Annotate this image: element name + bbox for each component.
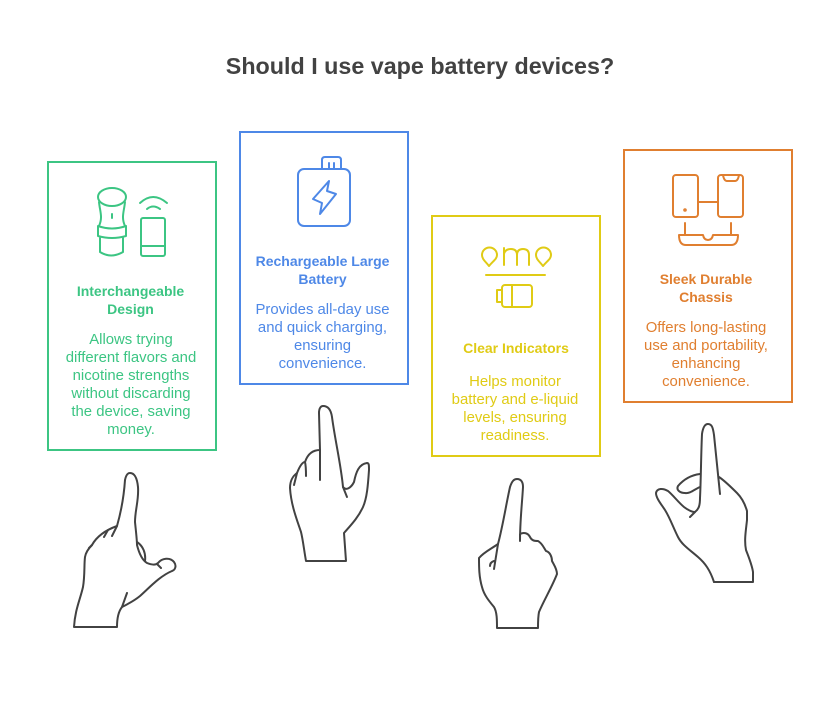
hand: pointing up under Clear Indicators (479, 479, 557, 628)
heading: Battery (298, 271, 347, 287)
description: levels, ensuring (463, 410, 567, 426)
heading: Rechargeable Large (256, 253, 390, 269)
description: nicotine strengths (73, 368, 189, 384)
description: the device, saving (71, 404, 191, 420)
heading: Chassis (679, 289, 733, 305)
icon: battery with lightning bolt (298, 157, 350, 226)
description: Offers long-lasting (646, 320, 766, 336)
hand: pointing up under Interchangeable Design (74, 473, 175, 627)
heading: Design (107, 301, 154, 317)
description: different flavors and (66, 350, 196, 366)
icon: connected phones and tray (673, 175, 743, 245)
title: Should I use vape battery devices? (226, 53, 614, 79)
heading: Clear Indicators (463, 340, 569, 356)
description: and quick charging, (258, 320, 387, 336)
hand: pointing up under Rechargeable Large Battery (290, 406, 369, 561)
description: Provides all-day use (255, 302, 390, 318)
description: Allows trying (89, 332, 173, 348)
description: use and portability, (644, 338, 768, 354)
description: without discarding (70, 386, 191, 402)
heading: Sleek Durable (660, 271, 753, 287)
panel: Rechargeable Large Battery (240, 132, 408, 384)
description: convenience. (662, 374, 750, 390)
description: readiness. (481, 428, 549, 444)
icon: indicators and battery (482, 248, 551, 307)
description: enhancing (672, 356, 740, 372)
description: convenience. (279, 356, 366, 372)
description: money. (107, 422, 155, 438)
heading: Interchangeable (77, 283, 184, 299)
description: ensuring (294, 338, 351, 354)
description: battery and e-liquid (452, 392, 578, 408)
description: Helps monitor (469, 374, 561, 390)
panel: Interchangeable Design (48, 162, 216, 450)
icon: interchangeable vape and phone (98, 188, 167, 256)
panel: Clear Indicators (432, 216, 600, 456)
panel: Sleek Durable Chassis (624, 150, 792, 402)
hand: pointing up under Sleek Durable Chassis (656, 424, 753, 582)
